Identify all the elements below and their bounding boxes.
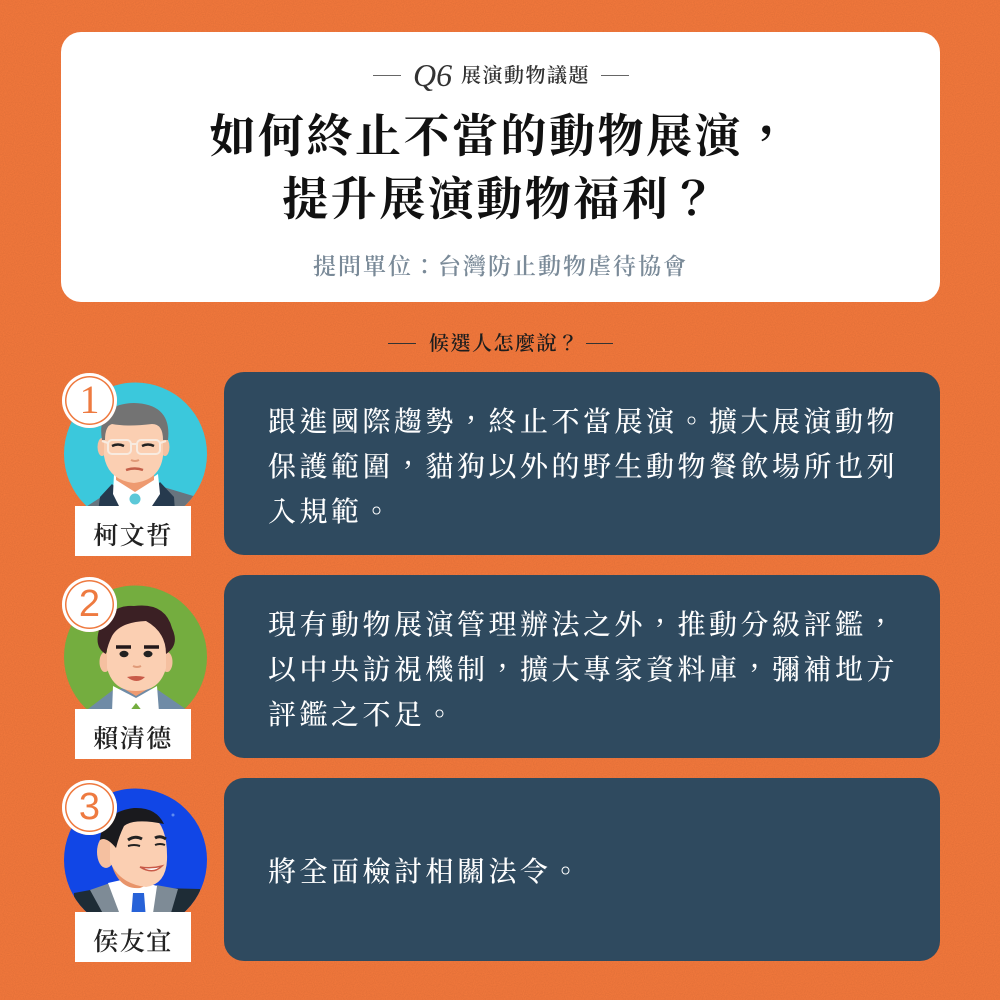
answer card 1 [224, 372, 940, 555]
section heading: 候選人怎麼說？ [429, 333, 580, 355]
answer card 3 [224, 778, 940, 961]
answer 2 text [268, 610, 898, 731]
name 1: 柯文哲 [93, 523, 173, 550]
badge 2 [62, 577, 117, 632]
answer 2 text: 以中央訪視機制，擴大專家資料庫，彌補地方 [268, 655, 898, 686]
name 3 [75, 912, 191, 962]
question label: 展演動物議題 [461, 65, 590, 87]
question label: Q6 [413, 57, 452, 93]
answer card 2 [224, 575, 940, 758]
title: 如何終止不當的動物展演， [210, 111, 792, 162]
badge 1: 1 [80, 377, 100, 422]
panel: question [61, 32, 940, 302]
question label [373, 57, 629, 93]
badge 2: 2 [79, 583, 100, 625]
name 1 [75, 506, 191, 556]
answer 3 text: 將全面檢討相關法令。 [268, 857, 583, 888]
candidate 1 portrait [64, 382, 207, 506]
title [210, 111, 792, 225]
answer 1 text [268, 407, 898, 528]
title: 提升展演動物福利？ [282, 174, 719, 225]
proposer: 提問單位：台灣防止動物虐待協會 [313, 254, 688, 279]
name 2: 賴清德 [93, 726, 173, 753]
badge 3: 3 [79, 786, 100, 828]
answer 2 text: 現有動物展演管理辦法之外，推動分級評鑑， [268, 610, 898, 641]
name 3: 侯友宜 [93, 929, 173, 956]
name 2 [75, 709, 191, 759]
answer 1 text: 保護範圍，貓狗以外的野生動物餐飲場所也列 [268, 452, 898, 483]
answer 1 text: 入規範。 [268, 497, 394, 528]
badge 1 [62, 373, 117, 428]
candidate 3 portrait [64, 788, 207, 912]
badge 3 [62, 780, 117, 835]
candidate 2 portrait [64, 586, 207, 709]
answer 2 text: 評鑑之不足。 [268, 700, 457, 731]
answer 1 text: 跟進國際趨勢，終止不當展演。擴大展演動物 [268, 407, 898, 438]
